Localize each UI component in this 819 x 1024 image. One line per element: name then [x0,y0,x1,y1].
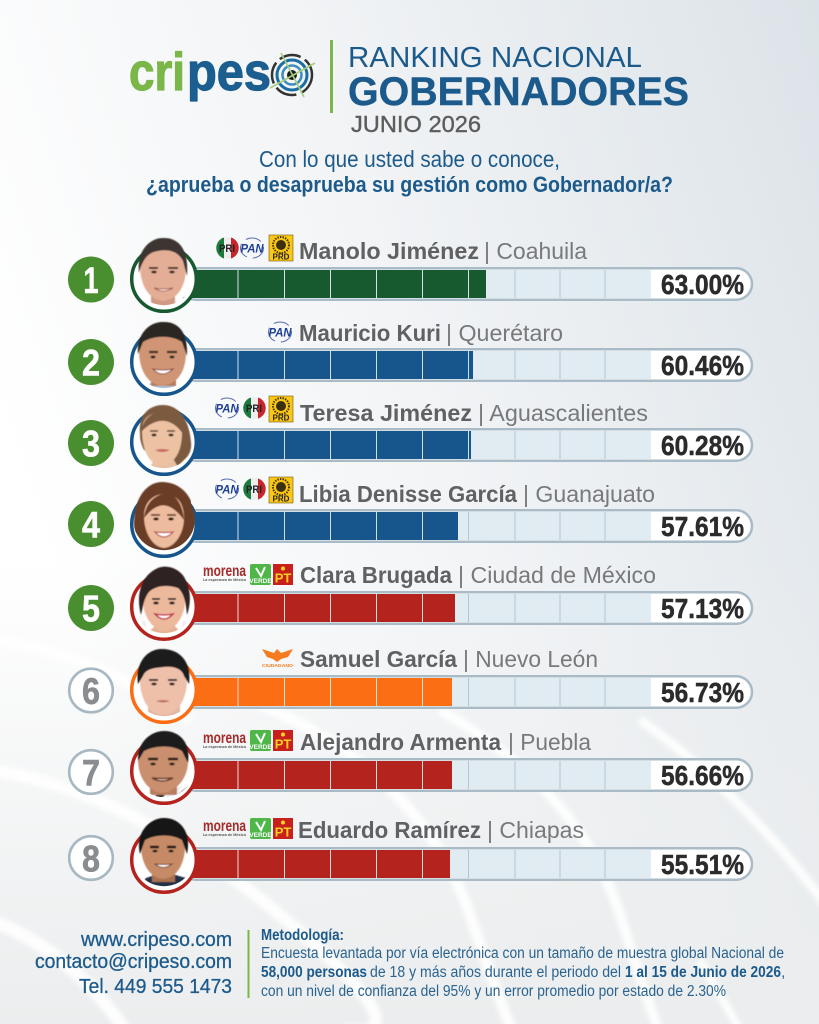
rank 2 [68,339,114,385]
rank 7 [69,750,113,794]
title: RANKING NACIONAL [348,42,642,74]
photo: Libia Denisse García [132,482,196,556]
logo: morena: morena [203,818,246,835]
name [300,646,598,672]
logo: VERDE: VERDE [249,744,272,751]
name: Samuel García [300,646,458,672]
rank 5 [68,585,114,631]
name: | Guanajuato [523,481,655,507]
rank 3 [68,420,114,466]
rank 3: 3 [82,424,100,464]
logo: cripeso [129,43,315,102]
name [300,562,656,588]
row 7: Alejandro Armenta [69,729,752,804]
bar 56.66% [180,759,752,791]
question: Con lo que usted sabe o conoce, [259,146,560,172]
bar 55.51%: 55.51% [661,849,744,880]
bar 60.46%: 60.46% [661,350,744,381]
logo: cripeso: cri [129,43,185,102]
row 8: Eduardo Ramírez [69,817,752,893]
name: | Aguascalientes [478,400,648,426]
photo: Eduardo Ramírez [132,818,196,893]
party logos [216,477,293,504]
photo: Clara Brugada [132,567,196,640]
logo: VERDE: VERDE [249,832,272,839]
title: GOBERNADORES [348,70,689,114]
rank 1: 1 [84,260,98,301]
photo: Manolo Jiménez [132,238,196,312]
rank 5: 5 [82,588,100,630]
name [300,400,648,426]
name [299,320,563,346]
logo: PRI: PRI [219,243,235,255]
methodology [261,927,785,1000]
methodology: con un nivel de confianza del 95% y un error promedio por estado de 2.30% [261,983,726,1000]
name: | Puebla [508,729,592,755]
photo: Mauricio Kuri [132,322,196,395]
rank 2: 2 [82,342,100,384]
footer divider [248,930,250,998]
contact: www.cripeso.com [80,928,232,951]
name [299,238,588,264]
rank 6 [69,669,113,712]
logo: PRI: PRI [246,484,262,496]
contact: Tel. 449 555 1473 [79,975,232,998]
logo: VERDE: VERDE [249,578,272,585]
rank 6: 6 [82,671,100,712]
logo: PRD: PRD [273,414,290,422]
row 4: Libia Denisse García [68,477,752,556]
bar 55.51% [180,848,752,880]
party logos [203,730,293,752]
row 5: Clara Brugada [68,562,752,640]
bar 60.46% [180,349,752,381]
bar 63.00% [180,268,752,300]
logo: morena: morena [203,730,246,747]
bar 57.13% [180,592,752,624]
party logos [216,235,293,262]
row 1: Manolo Jiménez [68,235,752,312]
row 6: Samuel García [69,646,752,724]
name [298,817,584,843]
name: | Nuevo León [463,646,598,672]
row 2: Mauricio Kuri [68,320,752,395]
bar 57.13%: 57.13% [661,593,744,624]
party logos [203,818,293,840]
photo: Teresa Jiménez [132,405,196,475]
logo: PT: PT [275,570,291,586]
name [299,481,655,507]
row 3: Teresa Jiménez [68,396,752,475]
bar 63.00%: 63.00% [661,269,744,300]
rank 4 [68,501,114,547]
logo: morena: morena [203,563,246,580]
party logos [216,396,293,422]
logo: Movimiento Ciudadano [262,649,293,668]
name: Eduardo Ramírez [298,817,481,843]
header divider [330,40,333,113]
contact: contacto@cripeso.com [35,950,232,973]
methodology: de 18 y más años durante el periodo del [370,964,621,981]
logo: Movimiento Ciudadano: CIUDADANO [262,663,293,668]
rank 4: 4 [82,504,100,546]
methodology: 58,000 personas [261,964,367,981]
rank 8 [69,836,113,880]
name: Teresa Jiménez [300,400,472,426]
methodology: 1 al 15 de Junio de 2026 [625,964,781,981]
name: Alejandro Armenta [300,729,502,755]
logo: PAN: PAN [268,326,292,340]
name: Clara Brugada [300,562,453,588]
logo: PAN: PAN [216,482,239,496]
party logos [203,563,293,586]
bar 56.73%: 56.73% [661,677,744,708]
logo: PRD: PRD [273,252,290,262]
name: | Chiapas [487,817,584,843]
photo: Samuel García [132,649,196,724]
logo: PRI: PRI [246,403,262,415]
name: | Coahuila [484,238,588,264]
name: Mauricio Kuri [299,320,441,346]
logo: morena: La esperanza de México [203,832,247,837]
bar 60.28%: 60.28% [661,430,744,461]
rank 7: 7 [82,752,100,794]
logo: PAN: PAN [216,402,239,416]
logo: PT: PT [275,824,291,840]
bar 56.73% [180,676,752,708]
title [348,42,689,137]
logo: morena: La esperanza de México [203,744,247,749]
logo: PT: PT [275,736,291,752]
logo: PAN: PAN [240,242,264,256]
title: JUNIO 2026 [351,111,481,137]
name: | Ciudad de México [458,562,656,588]
name: Manolo Jiménez [299,238,479,264]
bar 56.66%: 56.66% [661,760,744,791]
bar 57.61% [180,510,752,542]
logo: PAN [268,322,292,342]
methodology: Metodología: [261,927,344,944]
methodology: , [781,964,785,981]
name: | Querétaro [446,320,563,346]
logo: morena: La esperanza de México [203,577,247,582]
logo: PRD: PRD [273,494,290,504]
bar 60.28% [180,429,752,461]
logo: cripeso: pes [187,43,271,102]
rank 8: 8 [82,838,100,880]
photo: Alejandro Armenta [132,731,198,804]
question [146,146,673,197]
contact [35,928,232,998]
question: ¿aprueba o desaprueba su gestión como Gobernador/a? [146,172,673,197]
name: Libia Denisse García [299,481,518,507]
rank 1 [68,256,114,302]
bar 57.61%: 57.61% [661,511,744,542]
